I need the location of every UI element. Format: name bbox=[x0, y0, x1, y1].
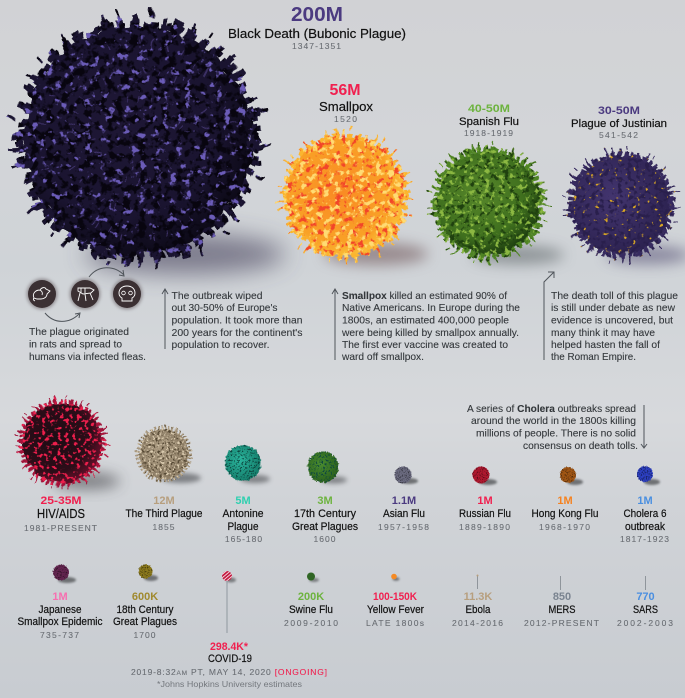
label: Cholera 6 outbreak: 1817-1923 bbox=[620, 534, 670, 544]
label: Yellow Fever: LATE 1800s bbox=[366, 618, 425, 628]
text block: Black Death note: The outbreak wiped bbox=[172, 290, 263, 302]
text block: plague origin: humans via infected fleas. bbox=[29, 351, 146, 363]
virus sphere: Cholera 6 bbox=[637, 466, 660, 485]
label: The Third Plague bbox=[126, 495, 202, 532]
arrow: rat to flea bbox=[45, 313, 80, 321]
label: The Third Plague: 12M bbox=[153, 495, 175, 507]
label: Cholera 6 outbreak: Cholera 6 bbox=[624, 508, 666, 520]
label: Cholera 6 outbreak: outbreak bbox=[625, 521, 665, 533]
label: HIV/AIDS: HIV/AIDS bbox=[37, 506, 85, 521]
label: MERS: 850 bbox=[553, 591, 571, 603]
label: 17th Century Great Plagues: 1600 bbox=[314, 534, 336, 544]
virus sphere: 17th Century Great Plagues bbox=[308, 452, 347, 484]
arrow: Smallpox note bbox=[332, 289, 338, 360]
virus sphere: HIV/AIDS bbox=[16, 397, 120, 489]
label: Russian Flu bbox=[459, 495, 511, 532]
label: Antonine Plague: Plague bbox=[228, 521, 258, 533]
text block: Smallpox note: Smallpox killed an estimated 90% of bbox=[342, 290, 507, 302]
label: Ebola bbox=[452, 591, 504, 628]
label: COVID-19: 298.4K* bbox=[210, 641, 249, 653]
label: HIV/AIDS bbox=[24, 495, 98, 533]
virus sphere: Hong Kong Flu bbox=[560, 467, 583, 485]
heading: Smallpox bbox=[319, 82, 374, 124]
label: SARS: SARS bbox=[633, 604, 658, 616]
arrow: flea to skull bbox=[89, 268, 124, 277]
label: COVID-19 bbox=[131, 641, 328, 689]
label: Cholera 6 outbreak bbox=[620, 495, 670, 544]
text block: Black Death note bbox=[172, 290, 303, 351]
label: Hong Kong Flu: 1968-1970 bbox=[539, 522, 591, 532]
heading: Plague of Justinian: 30-50M bbox=[598, 105, 640, 117]
label: MERS bbox=[524, 591, 600, 628]
text block: Black Death note: population. It took more than bbox=[172, 314, 303, 326]
text block: Justinian note: the Roman Empire. bbox=[551, 351, 636, 363]
text block: Smallpox note: Native Americans. In Europe during the bbox=[342, 302, 520, 314]
callout: Cholera note: consensus on death tolls. bbox=[523, 440, 638, 452]
text block: Smallpox note bbox=[341, 290, 520, 363]
text block: Justinian note: many think it may have bbox=[551, 327, 655, 339]
label: Antonine Plague: 5M bbox=[235, 495, 251, 507]
label: HIV/AIDS: 25-35M bbox=[40, 495, 82, 507]
text block: Justinian note: The death toll of this plague bbox=[551, 290, 678, 302]
label: SARS: 2002-2003 bbox=[617, 618, 674, 628]
label: Japanese Smallpox Epidemic bbox=[18, 591, 103, 640]
label: COVID-19: COVID-19 bbox=[208, 653, 252, 665]
label: Ebola: Ebola bbox=[466, 604, 491, 616]
heading: Black Death: Black Death (Bubonic Plague) bbox=[228, 26, 406, 41]
marker: Ebola bbox=[476, 574, 478, 589]
label: Asian Flu: 1957-1958 bbox=[378, 522, 430, 532]
heading: Spanish Flu: 1918-1919 bbox=[464, 128, 514, 138]
label: Ebola: 11.3K bbox=[464, 591, 492, 603]
label: COVID-19: 2019-8:32AM PT, MAY 14, 2020 [ONGOING] bbox=[131, 667, 328, 677]
text block: plague origin: The plague originated bbox=[29, 326, 129, 338]
label: MERS: 2012-PRESENT bbox=[524, 618, 600, 628]
label: Yellow Fever: 100-150K bbox=[373, 591, 417, 603]
virus sphere: COVID-19 with pin line bbox=[222, 571, 236, 633]
label: Asian Flu: Asian Flu bbox=[383, 508, 425, 520]
text block: Black Death note: 200 years for the continent's bbox=[172, 327, 302, 339]
label: 18th Century Great Plagues: 18th Century bbox=[116, 604, 174, 616]
label: Hong Kong Flu: Hong Kong Flu bbox=[532, 508, 598, 520]
text block: plague origin bbox=[29, 326, 146, 363]
label: Japanese Smallpox Epidemic: 735-737 bbox=[40, 630, 80, 640]
virus sphere: Black Death bbox=[11, 13, 285, 274]
label: Japanese Smallpox Epidemic: 1M bbox=[52, 591, 68, 603]
label: Antonine Plague bbox=[222, 495, 264, 544]
virus sphere: Spanish Flu bbox=[428, 143, 564, 264]
label: 17th Century Great Plagues bbox=[292, 495, 358, 544]
label: SARS: 770 bbox=[636, 591, 655, 603]
label: Swine Flu: Swine Flu bbox=[289, 604, 333, 616]
label: Asian Flu: 1.1M bbox=[392, 495, 416, 507]
label: Swine Flu: 200K bbox=[298, 591, 324, 603]
label: Hong Kong Flu: 1M bbox=[557, 495, 573, 507]
label: 17th Century Great Plagues: 17th Century bbox=[294, 508, 356, 520]
heading: Spanish Flu: Spanish Flu bbox=[459, 116, 519, 128]
label: 18th Century Great Plagues bbox=[113, 591, 177, 640]
virus sphere: The Third Plague bbox=[138, 428, 201, 483]
label: Antonine Plague: Antonine bbox=[222, 508, 264, 520]
heading: Black Death bbox=[228, 4, 406, 51]
label: Swine Flu: 2009-2010 bbox=[284, 618, 339, 628]
heading: Smallpox: 56M bbox=[330, 82, 360, 99]
arrow: Justinian note bbox=[544, 272, 554, 360]
label: Japanese Smallpox Epidemic: Japanese bbox=[38, 604, 82, 616]
virus sphere: Asian Flu bbox=[394, 466, 418, 484]
text block: Black Death note: population to recover. bbox=[172, 339, 270, 351]
label: Russian Flu: 1M bbox=[477, 495, 493, 507]
icons: rat to flea to skull transmission bbox=[26, 268, 142, 321]
virus sphere: Antonine Plague bbox=[225, 445, 270, 483]
text block: Black Death note: out 30-50% of Europe's bbox=[172, 302, 278, 314]
text block: Justinian note: helped hasten the fall of bbox=[551, 339, 660, 351]
heading: Black Death: 200M bbox=[291, 4, 343, 26]
label: 17th Century Great Plagues: Great Plagues bbox=[292, 521, 358, 533]
label: 18th Century Great Plagues: 600K bbox=[132, 591, 158, 603]
virus sphere: Smallpox bbox=[278, 129, 428, 265]
virus sphere: 18th Century Great Plagues bbox=[138, 564, 158, 581]
label: Antonine Plague: 165-180 bbox=[225, 534, 263, 544]
text block: Smallpox note: were being killed by smallpox annually. bbox=[341, 327, 519, 339]
label: Cholera 6 outbreak: 1M bbox=[637, 495, 653, 507]
label: SARS bbox=[617, 591, 674, 628]
marker: MERS bbox=[560, 576, 562, 590]
label: 18th Century Great Plagues: Great Plagues bbox=[113, 616, 177, 628]
callout: Cholera note: A series of Cholera outbreaks spread bbox=[467, 403, 636, 415]
heading: Spanish Flu bbox=[459, 103, 519, 138]
heading: Plague of Justinian: Plague of Justinian bbox=[571, 118, 667, 130]
virus sphere: Plague of Justinian bbox=[564, 148, 685, 264]
heading: Spanish Flu: 40-50M bbox=[468, 103, 510, 115]
label: Yellow Fever bbox=[366, 591, 425, 628]
heading: Plague of Justinian bbox=[571, 105, 667, 140]
label: 18th Century Great Plagues: 1700 bbox=[134, 630, 156, 640]
icon: rat bbox=[26, 278, 58, 310]
heading: Plague of Justinian: 541-542 bbox=[599, 130, 639, 140]
marker: SARS bbox=[644, 576, 646, 590]
label: Japanese Smallpox Epidemic: Smallpox Epidemic bbox=[18, 616, 103, 628]
text block: Smallpox note: ward off smallpox. bbox=[341, 351, 424, 363]
label: COVID-19: *Johns Hopkins University estimates bbox=[157, 679, 302, 689]
label: The Third Plague: The Third Plague bbox=[126, 508, 202, 520]
label: Hong Kong Flu bbox=[532, 495, 598, 532]
label: Swine Flu bbox=[284, 591, 339, 628]
virus sphere: Yellow Fever bbox=[391, 574, 400, 581]
callout: Cholera note: around the world in the 1800s killing bbox=[471, 415, 636, 427]
label: The Third Plague: 1855 bbox=[153, 522, 175, 532]
text block: Smallpox note: 1800s, an estimated 400,000 people bbox=[342, 314, 509, 326]
text block: Justinian note: is still under debate as new bbox=[551, 302, 675, 314]
callout: Cholera note: millions of people. There is no solid bbox=[476, 428, 636, 440]
label: 17th Century Great Plagues: 3M bbox=[317, 495, 333, 507]
virus sphere: Japanese Smallpox Epidemic bbox=[53, 564, 76, 583]
icon: flea bbox=[70, 278, 100, 310]
heading: Smallpox: Smallpox bbox=[319, 99, 374, 114]
virus sphere: Swine Flu bbox=[307, 572, 319, 582]
callout: Cholera note bbox=[467, 403, 647, 452]
label: Russian Flu: 1889-1890 bbox=[459, 522, 511, 532]
heading: Black Death: 1347-1351 bbox=[292, 41, 342, 51]
label: Russian Flu: Russian Flu bbox=[459, 508, 511, 520]
label: Ebola: 2014-2016 bbox=[452, 618, 504, 628]
text block: Justinian note: evidence is uncovered, but bbox=[551, 314, 673, 326]
icon: skull bbox=[112, 278, 142, 310]
text block: plague origin: in rats and spread to bbox=[29, 338, 122, 350]
virus sphere: Russian Flu bbox=[472, 466, 497, 485]
label: MERS: MERS bbox=[548, 604, 576, 616]
text block: Justinian note bbox=[551, 290, 678, 363]
label: Asian Flu bbox=[378, 495, 430, 532]
label: Yellow Fever: Yellow Fever bbox=[367, 604, 424, 616]
text block: Smallpox note: The first ever vaccine was created to bbox=[342, 339, 508, 351]
heading: Smallpox: 1520 bbox=[334, 114, 358, 124]
label: HIV/AIDS: 1981-PRESENT bbox=[24, 523, 98, 533]
arrow: Black Death note bbox=[162, 289, 168, 349]
